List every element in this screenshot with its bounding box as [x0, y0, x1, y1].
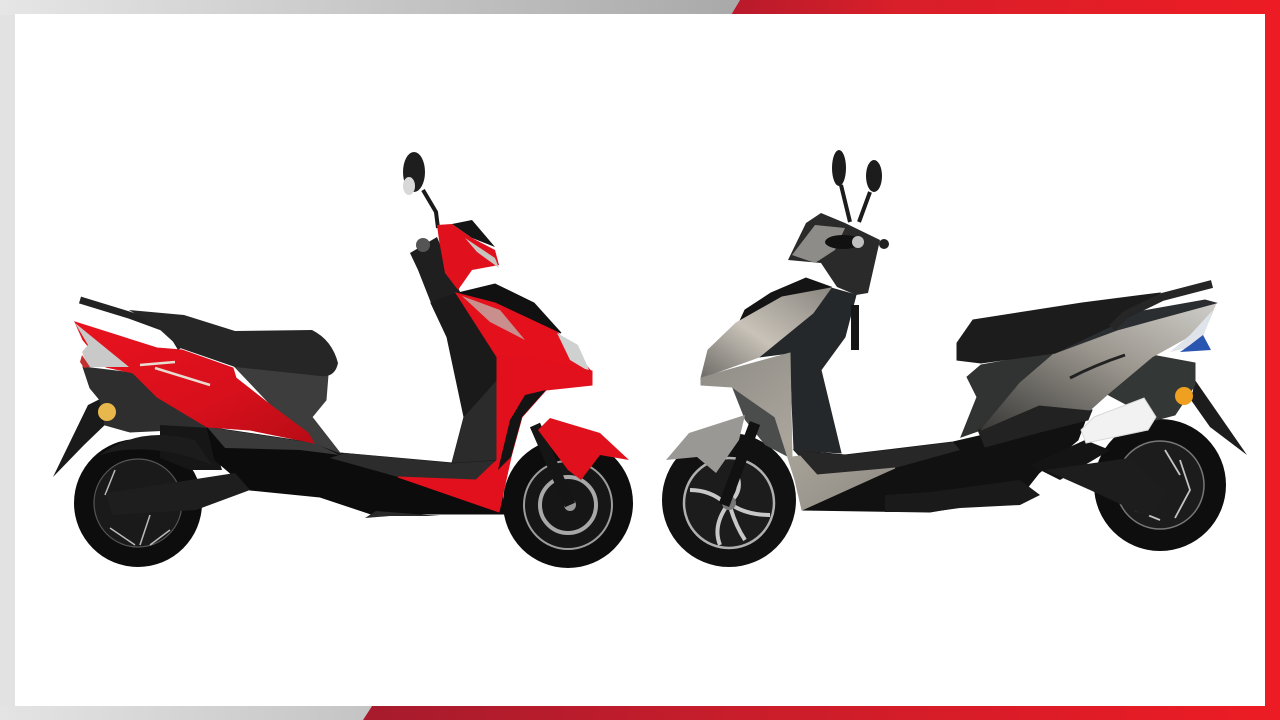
- red front panel: [398, 355, 592, 512]
- tail light lower: [80, 355, 90, 368]
- decal stripes: [140, 362, 210, 385]
- black upper leg shield: [431, 293, 499, 463]
- amber reflector: [98, 403, 116, 421]
- grip end: [416, 238, 430, 252]
- rear wheel: [74, 439, 202, 567]
- red scooter: [53, 152, 633, 568]
- floor plate: [794, 442, 960, 475]
- upper shield: [701, 288, 831, 378]
- black top cowl: [458, 284, 561, 333]
- under-tail bracket: [1105, 355, 1195, 420]
- floor board: [330, 453, 497, 480]
- inner leg dark panel: [452, 380, 497, 463]
- headlight: [557, 333, 590, 372]
- grab rail: [80, 300, 181, 348]
- seat: [957, 293, 1160, 363]
- under-tail bracket: [83, 367, 220, 450]
- swingarm: [1045, 458, 1167, 517]
- tail light: [1170, 310, 1213, 352]
- fork: [535, 425, 570, 505]
- rear fender: [100, 435, 212, 465]
- amber reflector: [1175, 387, 1193, 405]
- key fob: [851, 305, 859, 350]
- seat: [129, 310, 338, 376]
- red upper shield: [456, 293, 590, 370]
- front fender: [538, 418, 629, 480]
- floor frame: [794, 413, 1088, 512]
- shock region: [160, 425, 222, 470]
- dark recess behind leg panel: [732, 387, 790, 458]
- lower side panel: [207, 427, 340, 455]
- rear mudguard: [53, 397, 110, 477]
- black top cowl: [739, 278, 831, 323]
- under-seat dark panel: [235, 367, 340, 453]
- front wheel: [503, 438, 633, 568]
- grip end: [879, 239, 889, 249]
- mirror left: [832, 150, 850, 222]
- handlebar column: [410, 237, 460, 303]
- black cap: [452, 220, 495, 247]
- drive link: [1030, 440, 1110, 480]
- black front column: [759, 288, 856, 453]
- head light strip: [465, 238, 499, 268]
- red rear body panel: [75, 322, 314, 443]
- front wheel: [662, 433, 796, 567]
- handle head cowl: [437, 224, 499, 290]
- grey scooter: [662, 150, 1247, 567]
- main black floor frame: [207, 427, 505, 514]
- tail light: [75, 323, 129, 367]
- rear silver body: [981, 303, 1216, 430]
- silver leg panel: [701, 353, 895, 510]
- underside parts: [885, 480, 1040, 512]
- head silver panel: [792, 225, 845, 263]
- rack: [1112, 284, 1212, 328]
- head: [788, 213, 880, 295]
- under-seat dark panel: [961, 353, 1058, 437]
- decal: [1070, 355, 1125, 378]
- fork: [724, 423, 755, 505]
- black leg recess: [498, 390, 546, 470]
- dark strip above body: [1055, 300, 1216, 353]
- swingarm: [106, 473, 250, 515]
- instrument pod: [825, 235, 864, 249]
- rear wheel: [1094, 419, 1226, 551]
- white battery box: [1081, 398, 1156, 443]
- side stand: [365, 511, 440, 518]
- front fender: [666, 415, 745, 473]
- mirror: [403, 152, 438, 228]
- mirror right: [859, 160, 882, 222]
- shield highlight: [462, 296, 525, 340]
- mudguard: [1191, 380, 1247, 455]
- lower rear dark: [978, 403, 1092, 447]
- tail lamp blue: [1180, 335, 1211, 352]
